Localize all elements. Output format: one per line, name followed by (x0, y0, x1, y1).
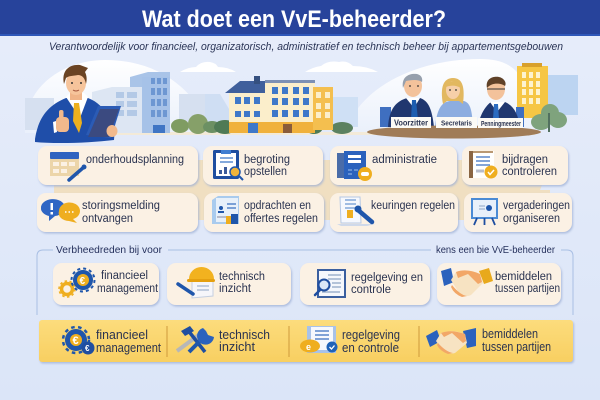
icon: ledger with check (469, 151, 498, 178)
card: begroting opstellen (203, 146, 323, 185)
icon: helmet and wrench (178, 267, 215, 298)
band item: technisch inzicht: technisch (219, 328, 270, 342)
card: administratie (330, 146, 457, 185)
card: bemiddelen tussen partijen: tussen partijen (495, 283, 560, 295)
card: technisch inzicht: inzicht (219, 283, 252, 295)
yellow tower (517, 63, 548, 118)
faded buildings (25, 75, 578, 130)
icon: speech bubbles (41, 199, 80, 223)
card: technisch inzicht (167, 263, 291, 305)
name cards: Penningmeester (481, 121, 521, 128)
name cards: Secretaris (441, 118, 472, 128)
card: opdrachten en offertes regelen: offertes regelen (244, 213, 318, 225)
card: regelgeving en controle: controle (351, 284, 391, 296)
band item: financieel management: management (96, 341, 161, 355)
icon: euro gear: € (85, 344, 90, 353)
card: begroting opstellen: begroting (244, 154, 290, 166)
band item: bemiddelen tussen partijen (426, 327, 551, 354)
band item: bemiddelen tussen partijen: tussen partijen (482, 340, 551, 354)
background blobs (25, 59, 535, 135)
band item: regelgeving en controle: regelgeving (342, 328, 400, 342)
section label right: kens een bie VvE-beheerder (436, 244, 555, 256)
office buildings (92, 72, 170, 133)
card: onderhoudsplanning (38, 146, 198, 185)
board members (380, 74, 524, 127)
card: opdrachten en offertes regelen (204, 193, 324, 232)
band item: technisch inzicht (177, 326, 270, 354)
card: technisch inzicht: technisch (219, 271, 265, 283)
card: bijdragen controleren: bijdragen (502, 154, 548, 166)
task cards (37, 146, 572, 232)
card: vergaderingen organiseren: vergaderingen (503, 200, 570, 212)
icon: handshake (441, 268, 493, 297)
band item: regelgeving en controle (300, 326, 400, 355)
icon: document, coin and check: e (306, 342, 311, 352)
card: onderhoudsplanning: onderhoudsplanning (86, 154, 184, 166)
card: financieel management: management (97, 283, 159, 295)
icon: budget clipboard (213, 150, 243, 180)
card: storingsmelding ontvangen: ontvangen (82, 213, 133, 225)
band item: technisch inzicht: inzicht (219, 340, 256, 354)
chairs (380, 107, 524, 127)
apartment buildings (225, 76, 333, 133)
band item: financieel management: financieel (96, 328, 148, 342)
table (367, 126, 541, 138)
card: storingsmelding ontvangen: storingsmelding (82, 200, 160, 212)
illustration scene (25, 59, 578, 143)
card: storingsmelding ontvangen (37, 193, 198, 232)
icon: calendar with wrench (50, 152, 86, 180)
tan backing (54, 160, 552, 220)
card: bemiddelen tussen partijen (437, 263, 561, 305)
icon: documents (212, 196, 239, 224)
card: financieel management: financieel (101, 270, 148, 282)
card: regelgeving en controle (300, 263, 430, 305)
card: bijdragen controleren: controleren (502, 166, 557, 178)
icon: euro gear: € (72, 335, 79, 347)
band item: regelgeving en controle: en controle (342, 341, 399, 355)
card: keuringen regelen: keuringen regelen (371, 200, 455, 212)
subtitle: Verantwoordelijk voor financieel, organizatorisch, administratief en technisch beheer bij appartementsgebouwen (49, 41, 563, 53)
card: bijdragen controleren (462, 146, 568, 185)
secretary (435, 78, 473, 127)
clouds (180, 62, 378, 72)
bracket frame (37, 250, 573, 315)
band item: financieel management (63, 327, 161, 355)
yellow summary band (39, 320, 573, 362)
icon: hammer and wrench (177, 326, 214, 352)
section label left: Verbheedreden bij voor (56, 244, 162, 256)
treasurer (478, 77, 520, 127)
trees (171, 114, 353, 134)
man with clipboard (35, 65, 121, 143)
card: vergaderingen organiseren: organiseren (503, 213, 560, 225)
icon: gears: € (80, 276, 86, 287)
icon: handshake (426, 328, 476, 354)
band item: bemiddelen tussen partijen: bemiddelen (482, 327, 538, 341)
icon: report with wrench (337, 197, 375, 226)
name cards: Voorzitter (394, 118, 428, 128)
expertise cards (53, 263, 561, 305)
icon: presentation board (472, 199, 497, 225)
card: begroting opstellen: opstellen (244, 166, 287, 178)
name cards (391, 117, 523, 128)
icon: document and magnifier (315, 270, 345, 297)
card: opdrachten en offertes regelen: opdrachten en (244, 200, 311, 212)
tree right (531, 104, 567, 132)
chair person (388, 74, 434, 127)
card: bemiddelen tussen partijen: bemiddelen (495, 271, 552, 283)
card: financieel management (53, 263, 159, 305)
header banner (0, 0, 600, 36)
icon: euro gear (63, 327, 94, 354)
card: vergaderingen organiseren (464, 193, 572, 232)
title: Wat doet een VvE-beheerder? (142, 6, 446, 33)
card: administratie: administratie (372, 154, 437, 166)
card: regelgeving en controle: regelgeving en (351, 272, 423, 284)
card: keuringen regelen (330, 193, 458, 232)
icon: binders (337, 151, 372, 181)
